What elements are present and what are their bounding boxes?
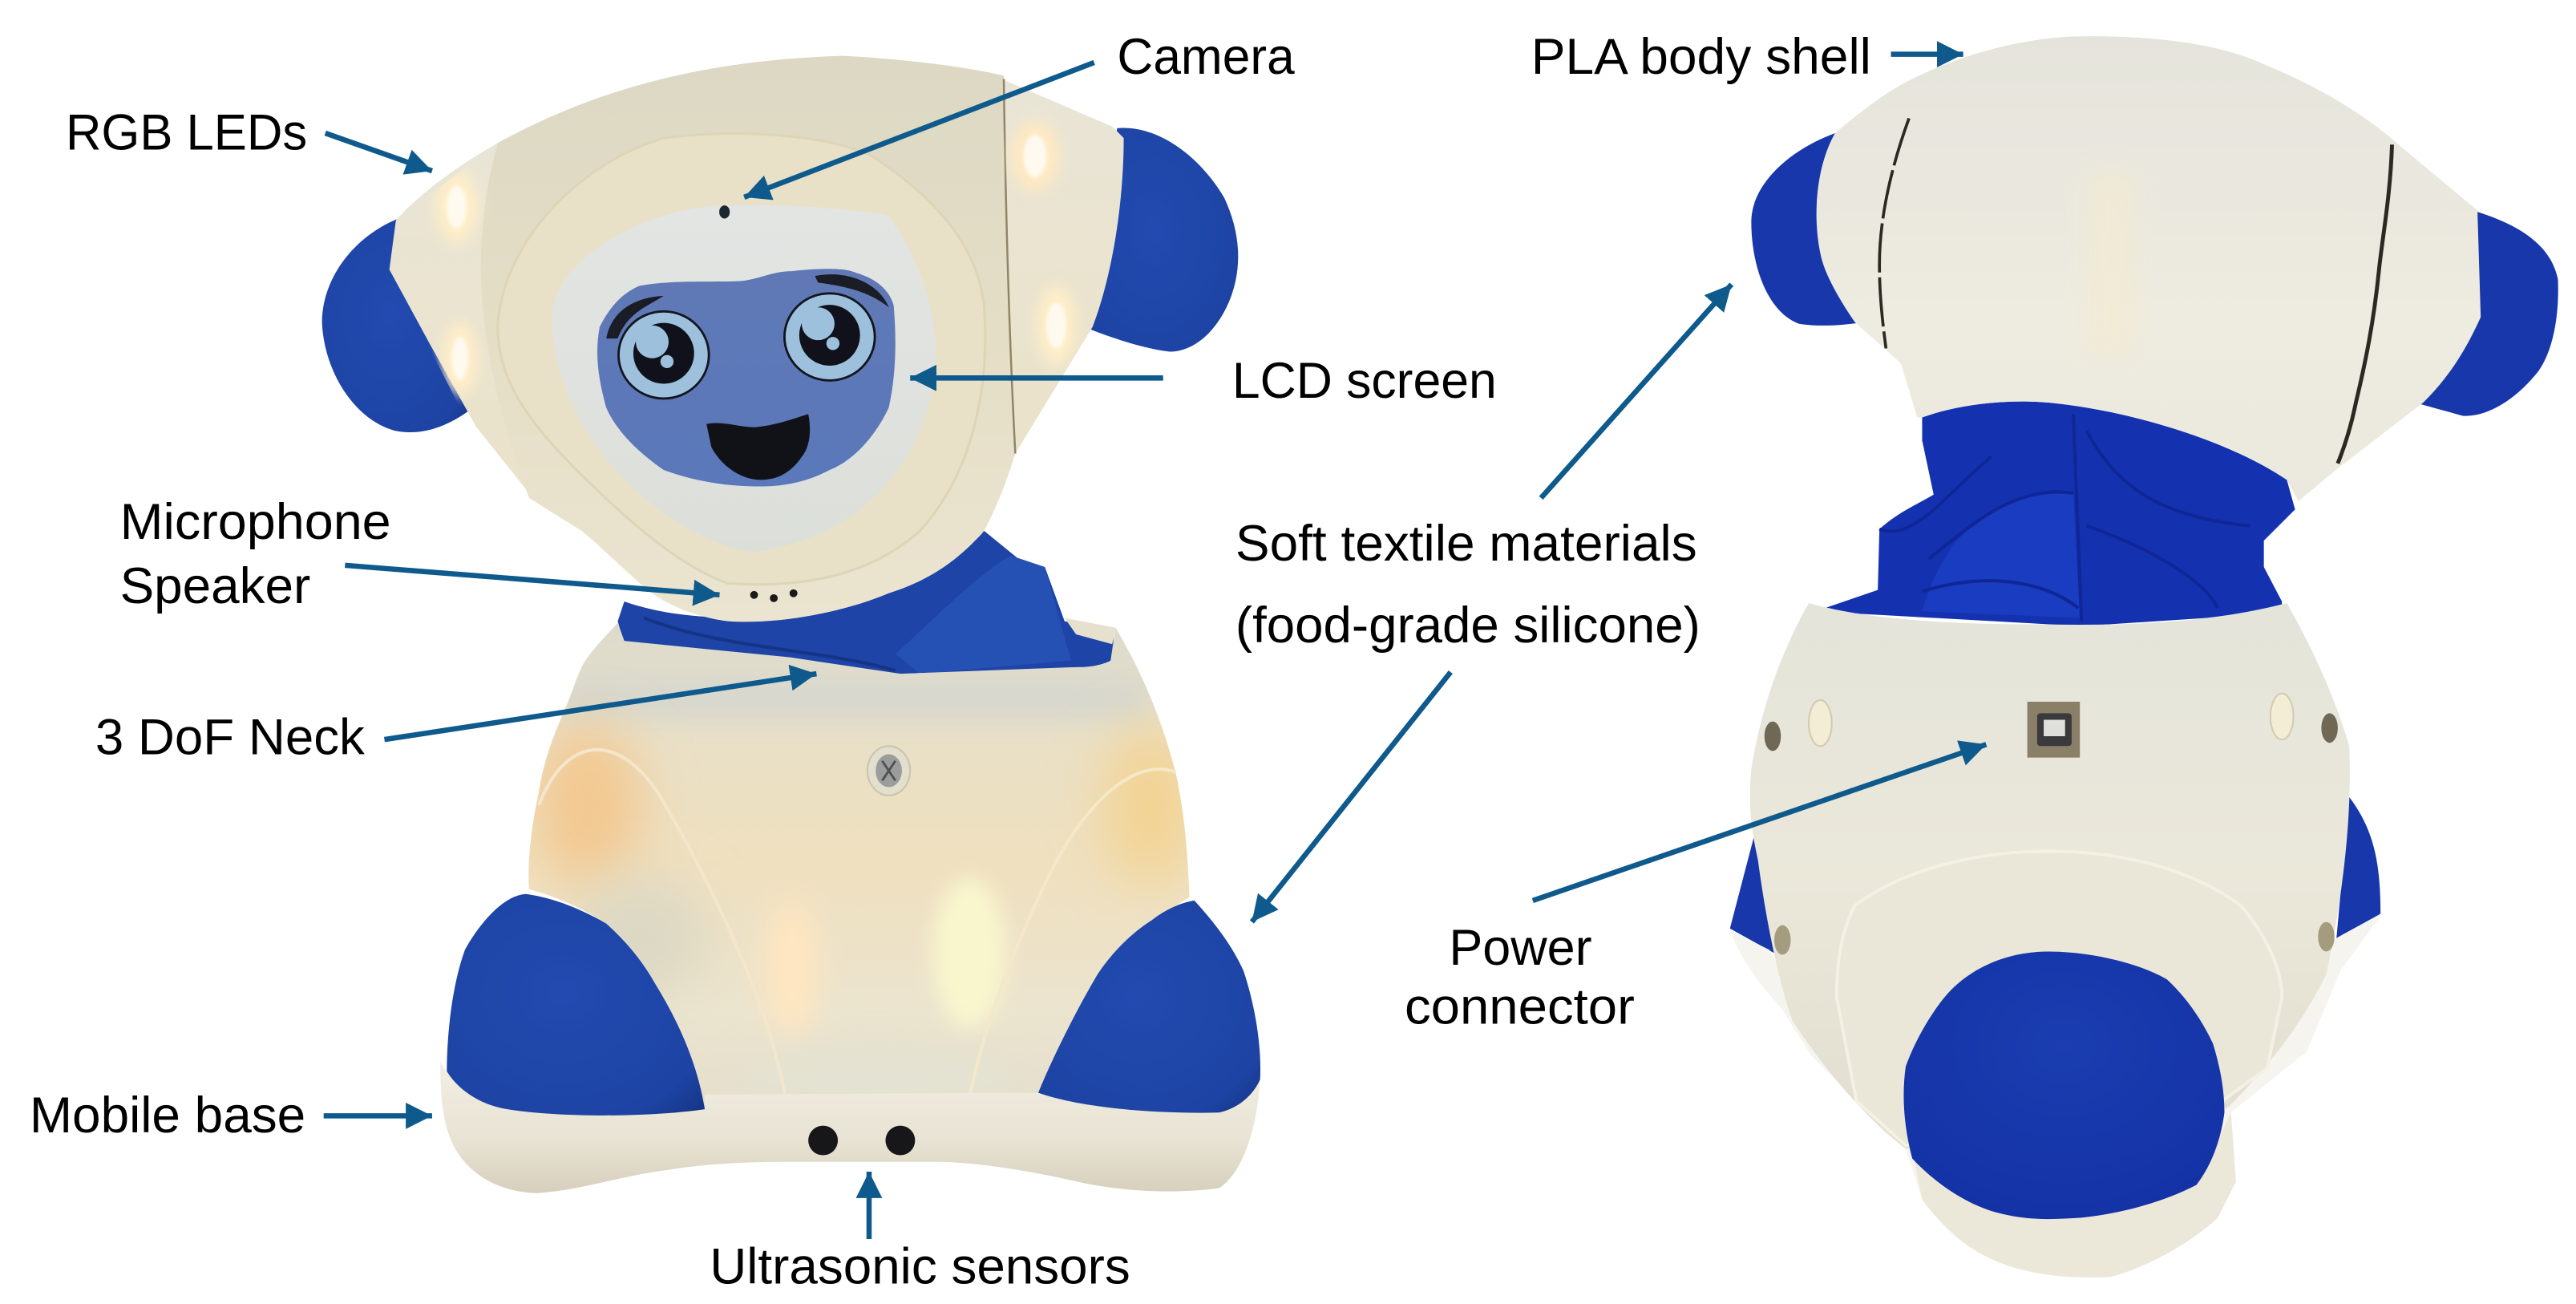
side feet <box>1730 797 2380 953</box>
central head shell <box>481 56 1015 622</box>
shell highlight <box>2086 172 2136 354</box>
left seam <box>1879 119 1909 348</box>
arrow: LCD screen <box>910 377 1163 379</box>
mouth <box>706 414 810 480</box>
label: RGB LEDs: RGB LEDs <box>66 103 307 160</box>
ultrasonic sensors <box>808 1126 915 1156</box>
left ear back <box>1751 132 1865 326</box>
label: Microphone Speaker: Speaker <box>120 557 310 614</box>
label: PLA body shell: PLA body shell <box>1531 28 1871 85</box>
arrow: Camera <box>744 63 1094 197</box>
arrow: RGB LEDs <box>326 133 432 171</box>
head shell <box>390 56 1124 622</box>
arrow: Microphone Speaker <box>345 565 720 595</box>
mobile base <box>440 1062 1260 1193</box>
RGB LED glows on head <box>435 122 1076 395</box>
rim behind neck <box>1065 618 1115 644</box>
microphone and speaker holes <box>750 589 798 602</box>
camera lens <box>719 205 730 219</box>
label: Power connector: Power <box>1449 919 1592 976</box>
right ear back <box>2415 210 2558 416</box>
LCD screen <box>597 269 896 487</box>
seam <box>1004 79 1015 454</box>
right ear <box>1084 128 1238 352</box>
label: 3 DoF Neck: 3 DoF Neck <box>95 709 365 766</box>
panel: robot back view <box>1730 36 2558 1278</box>
label: Microphone Speaker: Microphone <box>120 493 391 550</box>
panel: robot front view <box>322 56 1260 1193</box>
label: Power connector <box>1405 919 1635 1035</box>
right seam <box>2338 144 2392 464</box>
right eye <box>784 294 875 380</box>
body holes <box>1765 694 2338 955</box>
arrow: Soft textile to front foot <box>1252 672 1450 922</box>
left eye <box>618 311 709 399</box>
label: Soft textile materials <box>1235 515 1700 654</box>
left side shell <box>390 143 567 501</box>
right eyebrow <box>815 274 889 307</box>
back base <box>1730 912 2384 1278</box>
label: Mobile base: Mobile base <box>30 1087 305 1144</box>
arrow: 3 DoF Neck <box>384 674 816 739</box>
USB power connector <box>2028 702 2080 758</box>
right side shell <box>985 75 1124 460</box>
body hip arcs <box>539 750 785 1098</box>
arrow: PLA body shell <box>1891 53 1963 55</box>
label: Camera: Camera <box>1117 28 1295 85</box>
left eyebrow <box>606 296 664 338</box>
back head shell <box>1817 36 2481 501</box>
left ear <box>322 217 473 432</box>
base front <box>1912 1112 2236 1278</box>
right foot <box>1038 901 1260 1113</box>
label: Ultrasonic sensors: Ultrasonic sensors <box>710 1237 1130 1294</box>
label: Microphone Speaker <box>120 493 391 614</box>
label: Soft textile materials: (food-grade silicone) <box>1235 597 1700 654</box>
body shell <box>528 618 1196 1109</box>
screen bezel <box>552 205 936 553</box>
back body shell <box>1750 603 2350 1148</box>
foot arc <box>1837 851 2282 1145</box>
body glows and shading <box>529 665 1188 1033</box>
faceplate ring <box>498 133 985 585</box>
left foot <box>447 894 705 1116</box>
back foot <box>1903 951 2224 1219</box>
neck textile back <box>1815 402 2295 626</box>
label: Soft textile materials: Soft textile materials <box>1235 515 1697 572</box>
arrow: Soft textile to back ear <box>1541 285 1732 498</box>
arrow: Ultrasonic sensors <box>867 1172 871 1239</box>
arrow: Mobile base <box>324 1115 432 1117</box>
neck textile <box>617 531 1114 677</box>
chest screw <box>867 746 910 796</box>
label: Power connector: connector <box>1405 978 1635 1035</box>
label: LCD screen: LCD screen <box>1232 352 1497 409</box>
arrow: Power connector <box>1533 744 1986 901</box>
